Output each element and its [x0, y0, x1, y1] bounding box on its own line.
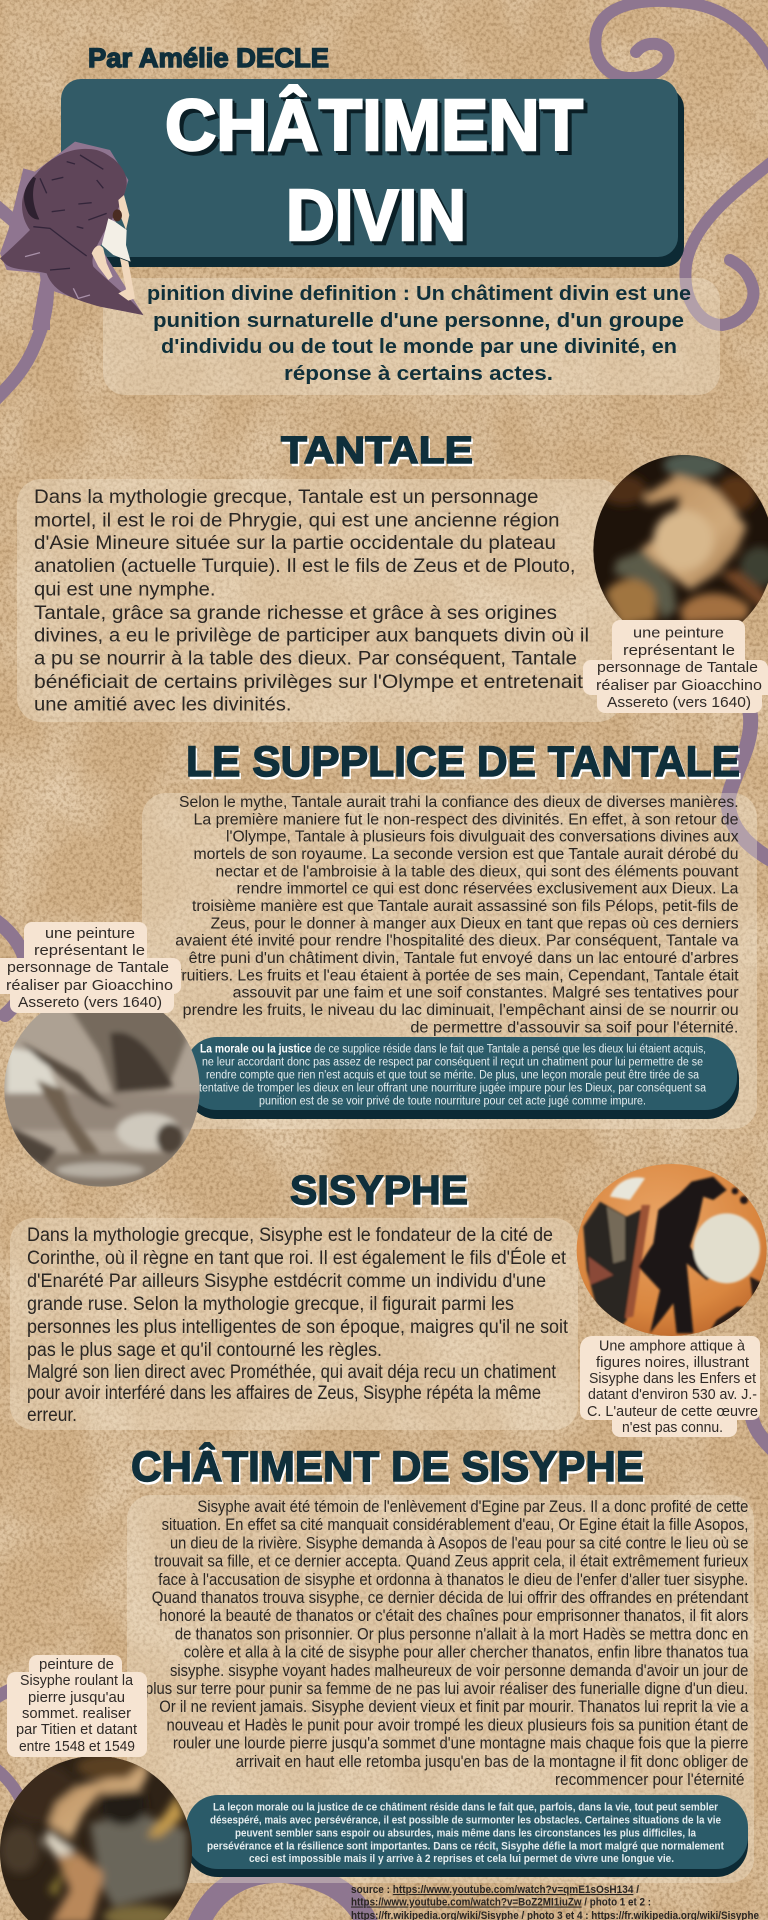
caption: Tantalus engraving: Assereto (vers 1640)	[18, 994, 162, 1011]
morale box: Sisyphe: La leçon morale ou la justice de ce châtiment réside dans le fait que, parfois, dans la vie, tout peut sembler	[213, 1801, 719, 1813]
caption: amphora	[580, 1336, 760, 1437]
caption: Sisyphus painting	[7, 1655, 147, 1757]
Tantale paragraph: qui est une nymphe.	[34, 578, 216, 600]
Tantale paragraph	[34, 486, 589, 716]
caption: Tantalus engraving: personnage de Tantale	[7, 959, 169, 976]
Sisyphe paragraph: pas le plus sage et qu'il contourné les règles.	[27, 1340, 382, 1361]
morale box: Tantale: tentative de tromper les dieux en leur offrant une nourriture jugée impure pour les Dieux, par conséquent sa	[199, 1083, 707, 1095]
person	[92, 195, 135, 301]
Sisyphe paragraph: pour avoir interféré dans les affaires de Zeus, Sisyphe répéta la même	[27, 1383, 541, 1404]
Tantale paragraph: Tantale, grâce sa grande richesse et grâce à ses origines	[34, 602, 557, 624]
caption: amphora: figures noires, illustrant	[596, 1354, 750, 1371]
caption: amphora: C. L'auteur de cette œuvre	[587, 1403, 758, 1420]
caption: Tantalus painting: réaliser par Gioacchino	[596, 677, 762, 694]
heading: Le supplice de Tantale: LE SUPPLICE DE TANTALE	[186, 738, 740, 786]
caption: Sisyphus painting: entre 1548 et 1549	[19, 1738, 135, 1755]
panel: Tantale text	[17, 479, 622, 722]
Sisyphe paragraph: Corinthe, où il règne en tant que roi. Il est également le fils d'Éole et	[27, 1248, 567, 1269]
panel: châtiment de Sisyphe text	[127, 1495, 754, 1883]
caption: Tantalus painting: personnage de Tantale	[597, 659, 758, 676]
Tantale paragraph: Dans la mythologie grecque, Tantale est un personnage	[34, 486, 538, 508]
supplice paragraph: mortels de son royaume. La seconde version est que Tantale aurait dérobé du	[194, 846, 738, 863]
Sisyphe paragraph: grande ruse. Selon la mythologie grecque, il figurait parmi les	[27, 1294, 514, 1315]
morale box: Tantale: punition est de se voir privé de toute nourriture pour cet acte jugé comme impure.	[259, 1096, 646, 1108]
photo: black-figure amphora	[570, 1160, 768, 1340]
title text: CHÂTIMENT	[165, 85, 583, 166]
caption: Tantalus painting: Assereto (vers 1640)	[607, 694, 751, 711]
Sisyphe paragraph: personnes les plus intelligentes de son époque, maigres qu'il ne soit	[27, 1317, 569, 1338]
sources	[351, 1884, 759, 1920]
heading: Tantale: TANTALE	[281, 430, 473, 472]
supplice paragraph: de permettre d'assouvir sa soif pour l'éternité.	[410, 1019, 738, 1036]
caption: amphora: Une amphore attique à	[599, 1338, 746, 1354]
châtiment paragraph	[145, 1498, 749, 1789]
Tantale paragraph: bénéficiait de certains privilèges sur l'Olympe et entretenait	[34, 671, 584, 693]
châtiment paragraph: recommencer pour l'éternité	[555, 1771, 744, 1789]
caption: amphora: Sisyphe dans les Enfers et	[589, 1370, 757, 1387]
supplice paragraph: Zeus, pour le donner à manger aux Dieux en tant que repas où ces derniers	[211, 915, 739, 932]
Tantale paragraph: divines, a eu le privilège de participer aux banquets divin où il	[34, 624, 589, 646]
Tantale paragraph: d'Asie Mineure située sur la partie occidentale du plateau	[34, 532, 556, 554]
morale box: Sisyphe	[186, 1795, 748, 1877]
caption: Tantalus painting: représentant le	[623, 642, 735, 659]
definition text: punition surnaturelle d'une personne, d'un groupe	[153, 310, 684, 332]
caption: Sisyphus painting: peinture de	[39, 1656, 114, 1673]
Sisyphe paragraph: Malgré son lien direct avec Prométhée, qui avait déja recu un chatiment	[27, 1362, 557, 1383]
supplice paragraph: prendre les fruits, le niveau du lac diminuait, l'empêchant ainsi de se nourrir ou	[183, 1002, 739, 1019]
title text: DIVIN	[286, 176, 466, 256]
painting: Sisyphus by Titian	[0, 1750, 200, 1920]
definition text: pinition divine definition : Un châtiment divin est une	[147, 283, 691, 305]
morale box: Sisyphe: ceci est impossible mais il y arrive à 2 reprises et cela lui permet de vivre une longue vie.	[249, 1853, 674, 1865]
supplice paragraph: avaient été invité pour rendre l'hospitalité des dieux. Par conséquent, Tantale va	[175, 933, 739, 950]
supplice paragraph: assouvit par une faim et une soif constantes. Malgré ses tentatives pour	[233, 985, 739, 1002]
illustration: Sisyphus pushing rock	[0, 142, 143, 330]
caption: Sisyphus painting: pierre jusqu'au	[28, 1689, 125, 1706]
supplice paragraph: rendre immortel ce qui est donc réservées exclusivement aux Dieux. La	[236, 881, 739, 898]
title banner	[61, 79, 684, 267]
caption: Tantalus engraving: une peinture	[45, 925, 135, 942]
definition text: d'individu ou de tout le monde par une divinité, en	[161, 336, 677, 358]
caption: Tantalus engraving: représentant le	[34, 942, 145, 959]
caption: Tantalus painting: une peinture	[633, 624, 724, 642]
supplice paragraph: Selon le mythe, Tantale aurait trahi la confiance des dieux de diverses manières.	[179, 794, 739, 811]
supplice paragraph: nectar et de l'ambroisie à la table des dieux, qui sont des éléments pouvant	[216, 863, 739, 880]
caption: amphora: n'est pas connu.	[622, 1419, 723, 1436]
panel: Sisyphe text	[10, 1218, 578, 1430]
Sisyphe paragraph	[27, 1225, 569, 1426]
morale box: Sisyphe: peuvent sembler sans espoir ou absurdes, mais même dans les circonstances les plus difficiles, la	[235, 1827, 697, 1839]
morale box: Tantale: La morale ou la justice de ce supplice réside dans le fait que Tantale a pensé que les dieux lui étaient acquis,	[200, 1044, 706, 1056]
Tantale paragraph: a pu se nourrir à la table des dieux. Par conséquent, Tantale	[34, 648, 577, 670]
supplice paragraph: troisième manière est que Tantale aurait assassiné son fils Pélops, petit-fils de	[192, 898, 739, 915]
Tantale paragraph: une amitié avec les divinités.	[34, 694, 292, 716]
supplice paragraph: fruitiers. Les fruits et l'eau étaient à portée de ses main, Cependant, Tantale était	[177, 967, 739, 984]
caption: Tantalus engraving	[0, 922, 181, 1013]
supplice paragraph: être puni d'un châtiment divin, Tantale fut envoyé dans un lac entouré d'arbres	[189, 950, 739, 967]
definition panel	[103, 278, 720, 395]
morale box: Sisyphe: persévérance et la résilience sont importantes. Dans ce récit, Sisyphe défie la mort malgré que normalement	[207, 1840, 724, 1852]
Tantale paragraph: mortel, il est le roi de Phrygie, qui est une ancienne région	[34, 510, 560, 532]
caption: Sisyphus painting: sommet. realiser	[22, 1705, 131, 1722]
painting: Tantalus torso	[593, 455, 768, 622]
morale box: Tantale: rendre compte que rien n'est acquis et que tout se mérite. De plus, une leçon morale peut être tirée de sa	[206, 1070, 700, 1082]
author credit: Par Amélie DECLE	[88, 43, 329, 73]
Sisyphe paragraph: Dans la mythologie grecque, Sisyphe est le fondateur de la cité de	[27, 1225, 553, 1246]
definition text	[147, 283, 691, 385]
caption: amphora: datant d'environ 530 av. J.-	[588, 1386, 757, 1403]
Sisyphe paragraph: d'Enarété Par ailleurs Sisyphe estdécrit comme un individu d'une	[27, 1271, 546, 1292]
heading: Châtiment de Sisyphe: CHÂTIMENT DE SISYPHE	[131, 1442, 644, 1491]
panel: supplice text	[142, 793, 757, 1129]
caption: Tantalus engraving: réaliser par Gioacchino	[6, 977, 173, 994]
title text	[165, 85, 583, 256]
morale box: Tantale: ne leur accordant donc pas assez de respect par conséquent il reçut un chatiment pour lui permettre de se	[202, 1057, 703, 1069]
engraving: Tantalus in the lake	[4, 1013, 200, 1187]
sources: https://www.youtube.com/watch?v=BoZ2MI1iuZw / photo 1 et 2 :	[351, 1896, 651, 1908]
supplice paragraph: La première maniere fut le non-respect des divinités. En effet, à son retour de	[194, 811, 738, 828]
Sisyphe paragraph: erreur.	[27, 1405, 77, 1426]
sources: source : https://www.youtube.com/watch?v=qmE1sOsH134 /	[351, 1884, 639, 1896]
caption: Tantalus painting	[583, 620, 768, 713]
morale box: Tantale	[185, 1037, 739, 1119]
caption: Sisyphus painting: par Titien et datant	[16, 1721, 138, 1738]
definition text: réponse à certains actes.	[284, 363, 553, 385]
supplice paragraph	[175, 794, 739, 1036]
caption: Sisyphus painting: Sisyphe roulant la	[20, 1672, 134, 1689]
heading: Sisyphe: SISYPHE	[290, 1167, 468, 1213]
supplice paragraph: l'Olympe, Tantale à plusieurs fois divulguait des conversations divines aux	[226, 829, 739, 846]
Tantale paragraph: anatolien (actuelle Turquie). Il est le fils de Zeus et de Plouto,	[34, 555, 576, 577]
